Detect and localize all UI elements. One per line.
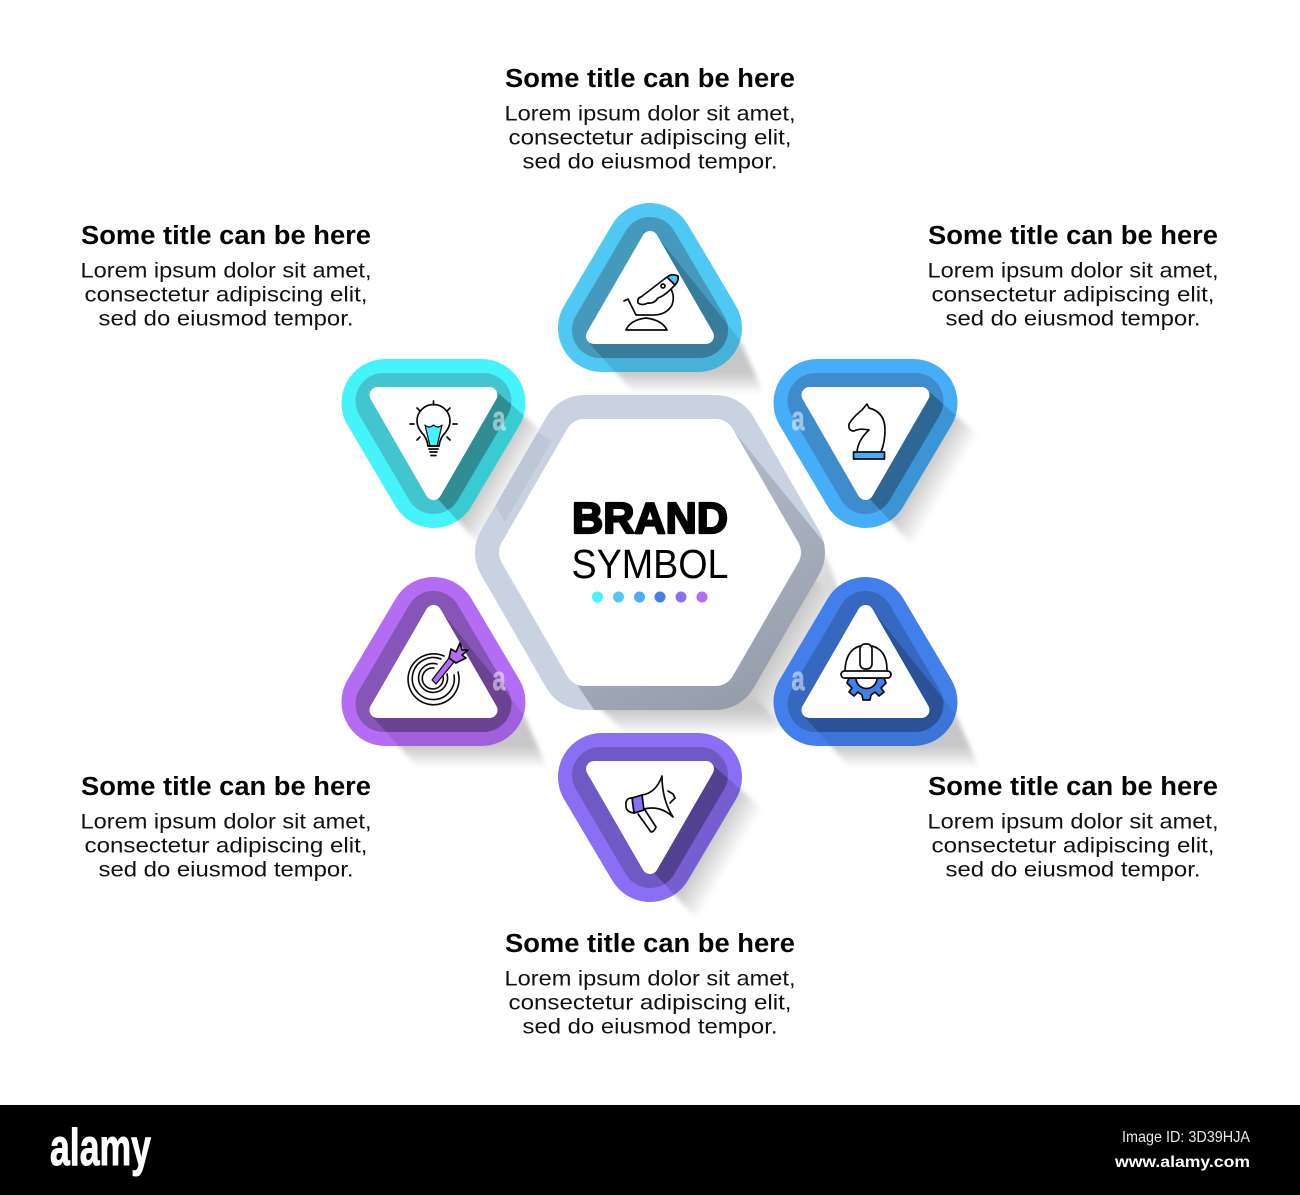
colour dots (592, 592, 708, 602)
icon: chess knight (849, 404, 885, 459)
icon: light bulb (410, 401, 457, 456)
panel: bottom violet triangle with megaphone (594, 766, 762, 919)
panel: centre hexagon (492, 430, 870, 760)
title block: top: Some title can be here (505, 65, 795, 93)
title block: lower right (928, 773, 1218, 882)
title block: top (504, 65, 796, 174)
title block: lower left (80, 773, 372, 882)
heading: SYMBOL: SYMBOL (572, 541, 728, 587)
footer image id: Image ID: 3D39HJA (1122, 1129, 1250, 1146)
panel: top sky triangle with microscope (590, 239, 764, 394)
title block: lower right: consectetur adipiscing elit, (932, 834, 1214, 858)
title block: upper left: Lorem ipsum dolor sit amet, (80, 258, 372, 282)
title block: lower right: Some title can be here (928, 773, 1218, 801)
title block: bottom: Some title can be here (505, 930, 795, 958)
icon: target with arrow (408, 643, 468, 705)
watermark glyphs: a (792, 660, 805, 698)
title block: top: sed do eiusmod tempor. (522, 150, 778, 174)
watermark glyphs: a (492, 400, 506, 438)
footer logo: alamy (50, 1119, 151, 1177)
icon: microscope (624, 275, 678, 330)
title block: upper right: Some title can be here (928, 222, 1218, 250)
title block: upper right (928, 222, 1218, 330)
title block: bottom: sed do eiusmod tempor. (522, 1014, 778, 1038)
title block: upper left (80, 222, 372, 330)
watermark glyphs (492, 400, 805, 698)
heading: BRAND: BRAND (572, 494, 728, 543)
footer bar (0, 1105, 1300, 1195)
panel: lower-right royal blue triangle with helmet and gear (806, 613, 980, 768)
panel: upper-left cyan triangle with light bulb (378, 392, 546, 545)
title block: top: Lorem ipsum dolor sit amet, (504, 102, 796, 126)
title block: bottom (504, 930, 796, 1038)
title block: bottom: Lorem ipsum dolor sit amet, (504, 966, 796, 990)
watermark glyphs: a (792, 400, 805, 438)
title block: lower left: sed do eiusmod tempor. (98, 858, 354, 882)
title block: upper right: Lorem ipsum dolor sit amet, (928, 258, 1218, 282)
panel: upper-right blue triangle with chess knight (810, 392, 978, 545)
title block: upper right: sed do eiusmod tempor. (946, 306, 1200, 330)
title block: lower left: consectetur adipiscing elit, (84, 834, 368, 858)
watermark glyphs: a (492, 660, 506, 698)
title block: upper left: Some title can be here (81, 222, 371, 250)
title block: top: consectetur adipiscing elit, (508, 126, 792, 150)
title block: upper left: sed do eiusmod tempor. (98, 306, 354, 330)
title block: upper left: consectetur adipiscing elit, (84, 282, 368, 306)
title block: lower left: Lorem ipsum dolor sit amet, (80, 810, 372, 834)
title block: upper right: consectetur adipiscing elit, (932, 282, 1214, 306)
title block: bottom: consectetur adipiscing elit, (508, 990, 792, 1014)
icon: helmet and gear (841, 644, 891, 700)
icon: megaphone (626, 776, 675, 832)
title block: lower right: Lorem ipsum dolor sit amet, (928, 810, 1218, 834)
panel: lower-left purple triangle with target (374, 613, 548, 768)
title block: lower left: Some title can be here (81, 773, 371, 801)
title block: lower right: sed do eiusmod tempor. (946, 858, 1200, 882)
footer url: www.alamy.com (1114, 1154, 1250, 1171)
